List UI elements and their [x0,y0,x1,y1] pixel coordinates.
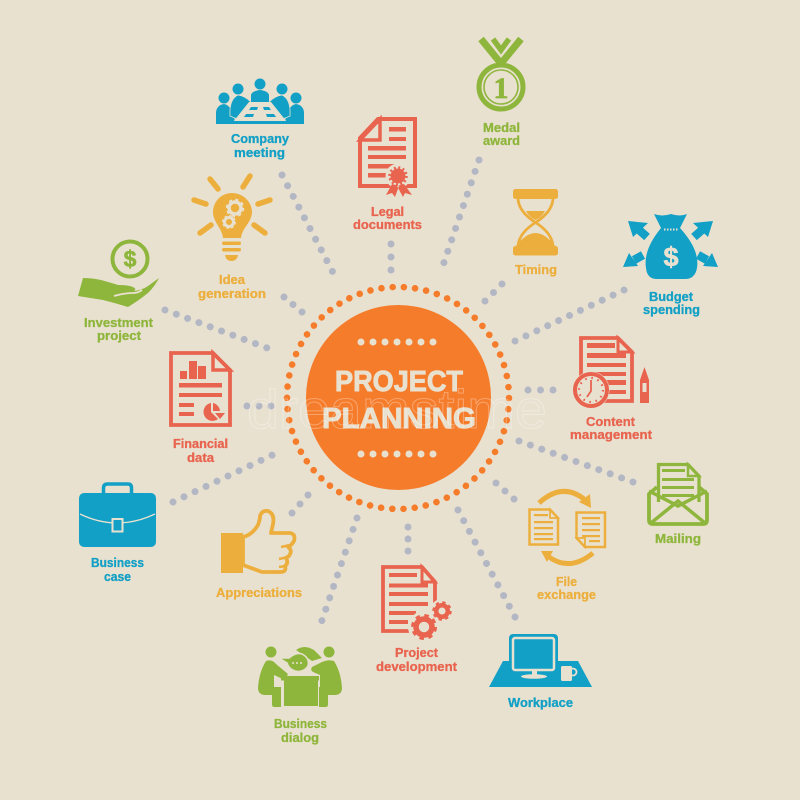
panel: content management [570,338,653,442]
panel: mailing [649,464,707,546]
label: Legal [371,205,404,219]
label [570,415,653,442]
label: award [483,134,520,148]
label: Company [231,132,289,146]
label [84,316,154,343]
label: case [104,570,131,584]
label: Mailing [655,532,701,546]
panel: company meeting [216,78,304,160]
label [274,717,327,745]
label [353,205,422,232]
label: Budget [649,290,694,304]
label: management [570,428,653,442]
panel: legal documents [353,119,422,232]
title line 2: PLANNING [322,403,476,435]
clock [572,372,610,408]
connector: appreciations [292,495,308,513]
panel: budget spending [623,214,718,317]
icon: briefcase [79,484,156,547]
bottom dot row [361,450,433,458]
label: data [187,451,215,465]
panel: workplace [489,634,592,710]
panel: project development [376,567,458,674]
label: documents [353,218,422,232]
panel: timing [513,189,558,277]
connector: medal award [440,160,479,274]
connector: financial data [247,402,271,410]
connector: business dialog [318,518,357,632]
icon: certificate document [360,119,415,197]
label [643,290,700,317]
dotted ring [287,287,509,509]
panel: business dialog [258,646,342,745]
connector: file exchange [496,483,514,499]
connector: idea generation [284,297,302,312]
panel: idea generation [194,176,270,301]
icon: thumbs up [221,511,294,573]
panel: investment project [78,242,159,343]
label: exchange [537,588,596,602]
label: Idea [219,273,246,287]
panel: file exchange [530,491,605,602]
label: Workplace [508,696,573,710]
connector: timing [485,284,502,301]
connector: company meeting [282,175,338,282]
panel: appreciations [216,511,302,600]
label: generation [198,287,266,301]
label: Medal [483,121,520,135]
medal numeral: 1 [494,72,508,105]
orange disc [306,305,491,490]
label [376,646,458,674]
label: Timing [515,263,557,277]
dollar sign: $ [663,242,679,272]
label [173,437,228,465]
connector: business case [173,450,283,502]
central badge: project planning [287,287,509,509]
icon: light bulb with gears [194,176,270,261]
label: Project [395,646,439,660]
connector: mailing [519,441,633,482]
label: dialog [281,731,319,745]
watermark: dreamstime [247,378,547,440]
label [483,121,520,148]
icon: document with clock and pencil [572,338,649,408]
label: spending [643,303,700,317]
connector: content management [528,386,553,394]
label: File [556,575,577,589]
dollar sign: $ [124,246,137,272]
label: development [376,660,458,674]
label: Business [91,556,144,570]
connector: budget spending [515,290,624,341]
icon: desk with monitor and cup [489,634,592,687]
top dot row [361,338,433,346]
connector: workplace [458,510,515,617]
connector: investment project [165,310,278,352]
icon: open envelope with letter [649,464,707,524]
icon: hourglass [513,189,558,256]
title line 1: PROJECT [335,366,463,398]
icon: two people at a table talking [258,646,342,707]
connector: project development [404,527,412,551]
icon: document with gears [383,567,454,643]
panel: medal award [479,39,523,148]
label: Investment [84,316,154,330]
label: project [97,329,142,343]
connector: legal documents [388,244,394,270]
icon: meeting table with people [216,78,304,124]
icon: two documents with circular arrows [530,491,605,564]
pencil [640,367,649,403]
label: meeting [234,146,285,160]
label: Business [274,717,327,731]
label [231,132,289,160]
label: Content [586,415,636,429]
label: Appreciations [216,586,302,600]
icon: report with charts [171,353,230,425]
panel: business case [79,484,156,584]
label [198,273,266,301]
label [537,575,596,602]
label [91,556,144,584]
label: Financial [173,437,228,451]
panel: financial data [171,353,230,465]
